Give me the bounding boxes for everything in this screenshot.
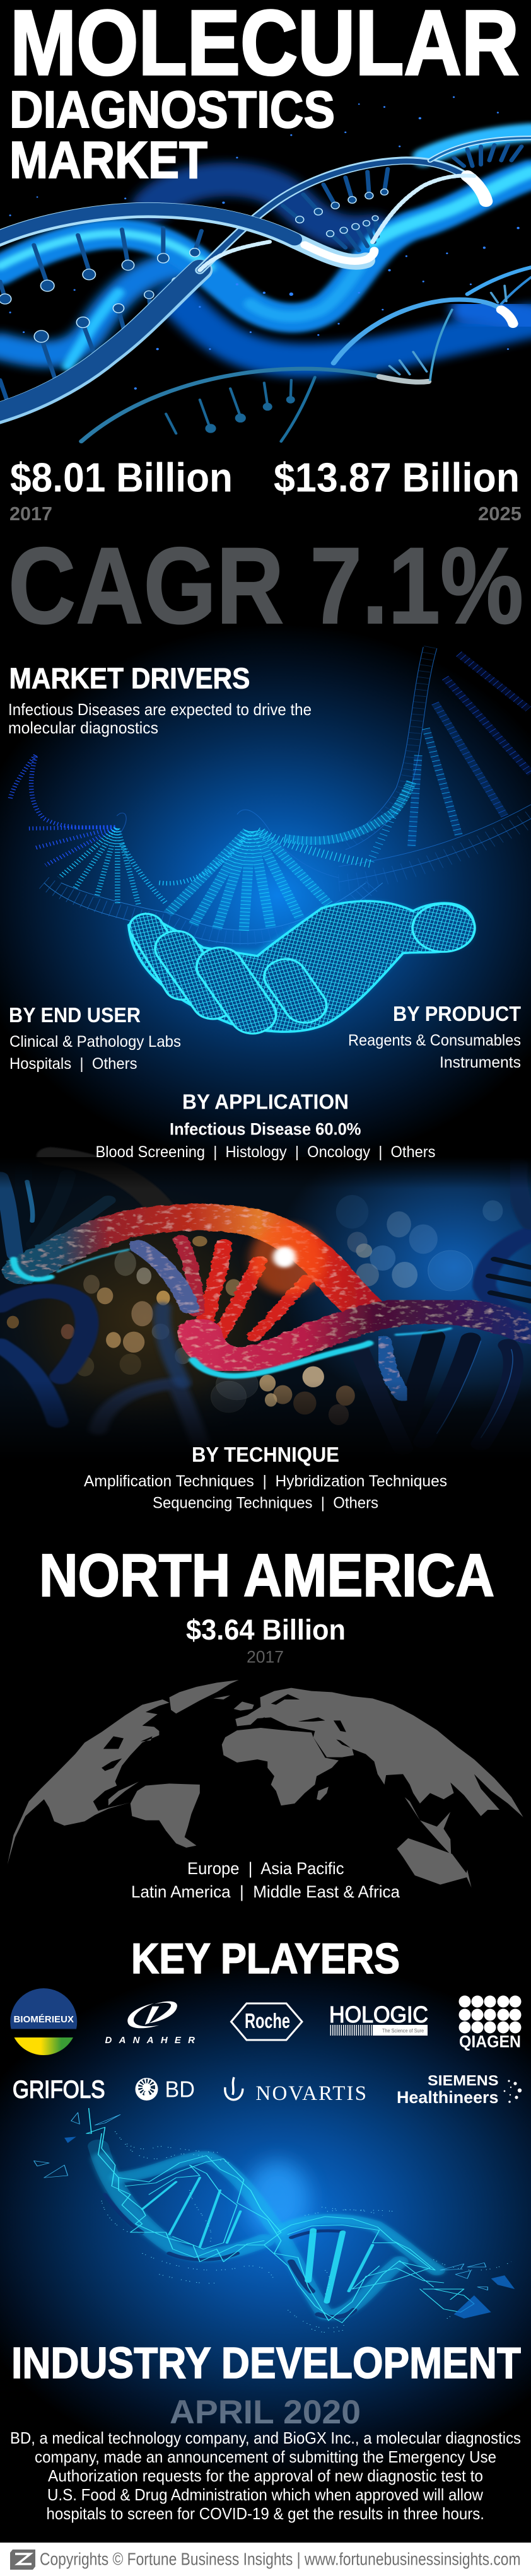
- star particles: [9, 96, 520, 390]
- by product: Reagents & Consumables: [348, 1032, 521, 1049]
- stat: 2025 value: [274, 454, 522, 525]
- Africa: [222, 1728, 339, 1805]
- section background: red DNA image: [0, 1157, 531, 1466]
- logo: Novartis: [225, 2077, 366, 2105]
- world map: [8, 1680, 523, 1887]
- dark blue rungs top right: [369, 654, 531, 864]
- rungs: [143, 2177, 373, 2302]
- by product: BY PRODUCT: [393, 1002, 521, 1025]
- market drivers: MARKET DRIVERS: [9, 662, 250, 695]
- industry development: [10, 2338, 521, 2523]
- market drivers: molecular diagnostics: [8, 718, 158, 737]
- logo: bioMérieux: BIOMÉRIEUX: [14, 2014, 74, 2025]
- hero image: blue DNA helices: [0, 96, 531, 441]
- by product: Instruments: [440, 1054, 521, 1071]
- beaded strand: [200, 175, 474, 271]
- red rungs: [139, 1240, 306, 1337]
- Indonesia: [405, 1797, 451, 1855]
- upper strand: [0, 210, 366, 262]
- strand wires: [86, 2108, 474, 2322]
- other regions: Latin America | Middle East & Africa: [131, 1882, 400, 1901]
- bright strand: [24, 1217, 361, 1305]
- logo: Danaher: [105, 2002, 195, 2046]
- wireframe DNA helix: [10, 647, 531, 943]
- Cuba: [108, 1781, 139, 1805]
- Greenland: [169, 1680, 239, 1713]
- stat: 2025 value: 2025: [478, 503, 522, 525]
- logo: BD: [135, 2076, 195, 2102]
- by end user: BY END USER: [9, 1003, 141, 1027]
- footer: [0, 2543, 531, 2576]
- logo: BD: BD: [165, 2076, 195, 2102]
- by technique: Amplification Techniques | Hybridization Techniques: [84, 1472, 447, 1490]
- soft glow of strands: [102, 2157, 437, 2315]
- by technique: BY TECHNIQUE: [192, 1443, 339, 1466]
- fades around red DNA image: [0, 1157, 531, 1472]
- north america: 2017: [247, 1647, 284, 1666]
- development description: hospitals to screen for COVID-19 & get the results in three hours.: [47, 2504, 484, 2523]
- by end user: Hospitals | Others: [9, 1055, 137, 1073]
- by application: BY APPLICATION: [182, 1090, 349, 1114]
- development description: U.S. Food & Drug Administration which when approved will allow: [47, 2485, 483, 2504]
- particle dots: [102, 2131, 511, 2333]
- wire tube strands: [44, 647, 531, 943]
- logo: Hologic: The Science of Sure: [382, 2028, 424, 2034]
- fragments: [34, 2113, 487, 2290]
- stat: 2017 value: [9, 454, 233, 525]
- development description: Authorization requests for the approval of new diagnostic test to: [48, 2466, 483, 2485]
- development description: company, made an announcement of submitting the Emergency Use: [35, 2447, 496, 2466]
- lower right dark strands: [359, 1337, 513, 1450]
- by end user: [9, 1003, 181, 1073]
- upper left dark strand: [0, 1156, 159, 1255]
- footer logo: [10, 2550, 35, 2570]
- stat: 2025 value: $13.87 Billion: [274, 454, 520, 501]
- strand bodies: [98, 2146, 437, 2315]
- market drivers: [8, 662, 312, 737]
- title: DIAGNOSTICS: [9, 80, 335, 139]
- left radiating rungs: [10, 755, 115, 865]
- pink lower strand: [200, 1310, 531, 1361]
- section background: hand and wireframe glow: [0, 599, 531, 1167]
- back helix, lower right: [81, 267, 531, 441]
- logo: Grifols: GRIFOLS: [13, 2076, 105, 2104]
- by application: Blood Screening | Histology | Oncology | Others: [96, 1143, 435, 1161]
- industry development: APRIL 2020: [170, 2394, 361, 2431]
- logo: Hologic: HOLOGIC: [329, 2002, 428, 2027]
- logo: Siemens Healthineers: SIEMENS: [428, 2072, 498, 2089]
- Australia: [397, 1838, 469, 1885]
- stat: 2017 value: $8.01 Billion: [10, 454, 233, 501]
- title: MARKET: [9, 131, 207, 189]
- key players heading: KEY PLAYERS: [131, 1935, 400, 1983]
- stat: 2017 value: 2017: [9, 503, 52, 525]
- main helix: [0, 138, 531, 414]
- UK: [234, 1701, 254, 1711]
- lower strand: [0, 271, 200, 414]
- logo: Danaher: DANAHER: [105, 2035, 195, 2046]
- South America: [131, 1783, 200, 1848]
- by application: Infectious Disease 60.0%: [170, 1120, 361, 1139]
- logo: Siemens Healthineers: [397, 2072, 522, 2107]
- section background: lower blue glow: [0, 1961, 531, 2478]
- dark shadows of strands: [105, 2194, 354, 2317]
- low-poly cyan DNA helix: [34, 2108, 515, 2333]
- by product: [348, 1002, 521, 1071]
- other regions: [131, 1859, 400, 1901]
- by application: [96, 1090, 435, 1161]
- logo: Siemens Healthineers: Healthineers: [397, 2088, 498, 2107]
- logo: Qiagen: QIAGEN: [459, 2032, 521, 2051]
- north america: [39, 1542, 494, 1666]
- navy background helices: [0, 1165, 531, 1442]
- logo: bioMérieux: [10, 1988, 77, 2055]
- logo: Novartis: NOVARTIS: [256, 2082, 366, 2105]
- glow spark: [250, 1223, 325, 1295]
- North America: [8, 1699, 170, 1865]
- red DNA helix: [0, 1156, 531, 1450]
- Inland seas: [250, 1694, 351, 1748]
- by end user: Clinical & Pathology Labs: [9, 1033, 181, 1051]
- title: [9, 0, 519, 189]
- by technique: Sequencing Techniques | Others: [153, 1495, 378, 1512]
- other regions: Europe | Asia Pacific: [187, 1859, 344, 1878]
- icon: wireframe hand: [124, 901, 475, 1040]
- market drivers: Infectious Diseases are expected to drive the: [8, 700, 312, 719]
- bright bands: [168, 782, 411, 931]
- bokeh lights: [7, 1195, 503, 1425]
- logo: Qiagen: [459, 1995, 521, 2051]
- hand glow: [129, 901, 474, 1032]
- by technique: [84, 1443, 447, 1512]
- palm: [129, 901, 474, 1032]
- logo: Roche: Roche: [245, 2009, 290, 2032]
- Madagascar: [317, 1786, 329, 1800]
- north america: $3.64 Billion: [186, 1614, 346, 1646]
- logo: Roche: [231, 2003, 302, 2040]
- Eurasia: [235, 1688, 523, 1817]
- development description: [10, 2428, 521, 2523]
- rungs: [0, 145, 522, 400]
